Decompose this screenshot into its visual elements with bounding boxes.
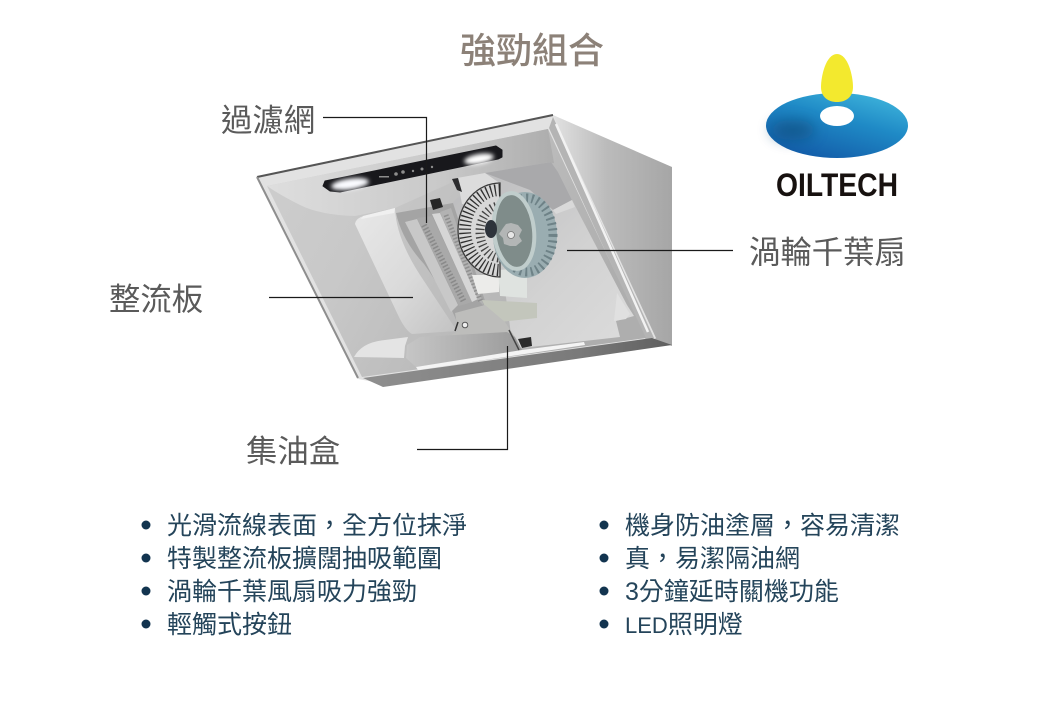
leader line: filter [323,118,426,223]
feature list: left [142,512,467,639]
title: 強勁組合 [460,30,604,71]
feature list: right [600,512,900,639]
motor [485,220,497,238]
leader line: oil box [417,346,508,450]
logo oil drop [821,54,853,102]
feature: delayed shutdown: 3分鐘延時關機功能 [625,578,839,606]
valance [267,129,554,216]
baffle plate [355,208,457,334]
lower duct block [482,300,537,322]
feature: smooth surface: 光滑流線表面，全方位抹淨 [167,512,467,540]
logo disc shadow [771,120,815,140]
logo disc [766,93,908,158]
leader line: turbine fan [567,250,733,252]
interior back wall [450,162,634,349]
filter mesh [396,198,487,322]
range hood illustration [257,115,672,387]
left light [330,176,370,192]
oil collection box [406,305,585,370]
label: filter: 過濾網 [221,103,315,138]
fan hub [499,223,522,246]
label: turbine fan: 渦輪千葉扇 [749,235,906,270]
logo highlight [820,106,854,126]
feature: coating: 機身防油塗層，容易清潔 [625,512,900,540]
hood inner shell [267,129,646,377]
touch buttons [379,166,433,178]
label: oil box: 集油盒 [246,434,340,469]
feature: baffle: 特製整流板擴闊抽吸範圍 [167,545,442,573]
hood top rim [257,115,656,384]
right rim edge [549,117,654,340]
feature: touch button: 輕觸式按鈕 [167,611,292,639]
OILTECH logo [766,54,908,203]
bottom left trim [354,337,408,358]
label: baffle: 整流板 [109,282,203,317]
duct behind fan [457,173,498,205]
leader line: baffle [269,296,413,298]
hood side panel [553,115,672,346]
feature: filter net: 真，易潔隔油網 [625,545,800,573]
feature: fan: 渦輪千葉風扇吸力強勁 [167,578,417,606]
right light [463,151,495,167]
turbine fan wheel [485,190,557,278]
white block under guard [472,275,499,294]
lower dark band [363,338,672,387]
filter clip [430,198,443,210]
feature: LED: LED照明燈 [625,611,743,639]
control panel [323,146,502,192]
fan guard [458,183,500,277]
logo wordmark: OILTECH [776,167,898,203]
